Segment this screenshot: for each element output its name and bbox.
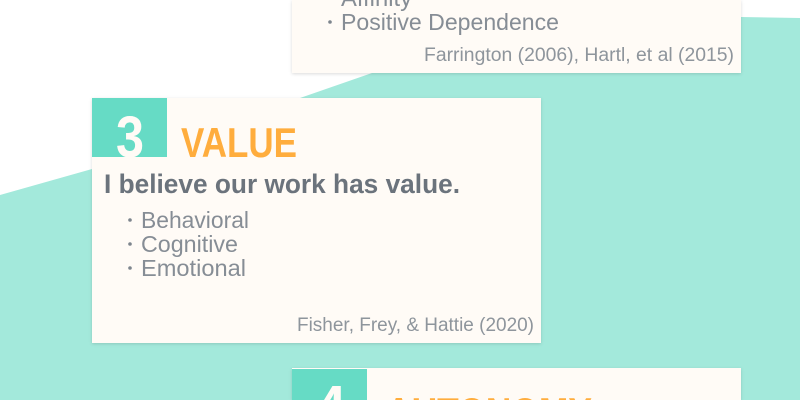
list: card 2 items bbox=[328, 0, 559, 35]
number badge 3 bbox=[92, 98, 167, 157]
panel: card 2 (partial) bbox=[292, 0, 741, 73]
list: card 2 items: Positive Dependence bbox=[341, 9, 559, 35]
citation: card 3: Fisher, Frey, & Hattie (2020) bbox=[297, 315, 534, 336]
heading: value: VALUE bbox=[181, 119, 297, 166]
statement: I believe our work has value. bbox=[104, 169, 460, 199]
panel: card 3 value bbox=[92, 98, 541, 343]
list: engagement types: Behavioral bbox=[141, 207, 249, 233]
list: engagement types: Emotional bbox=[141, 255, 246, 281]
number badge 3: 3 bbox=[116, 105, 144, 170]
list: engagement types: Cognitive bbox=[141, 231, 238, 257]
number badge 4 bbox=[292, 369, 367, 400]
citation: card 2: Farrington (2006), Hartl, et al (2015) bbox=[424, 45, 734, 66]
list: engagement types bbox=[128, 207, 249, 281]
panel: card 4 autonomy (partial) bbox=[292, 368, 741, 400]
